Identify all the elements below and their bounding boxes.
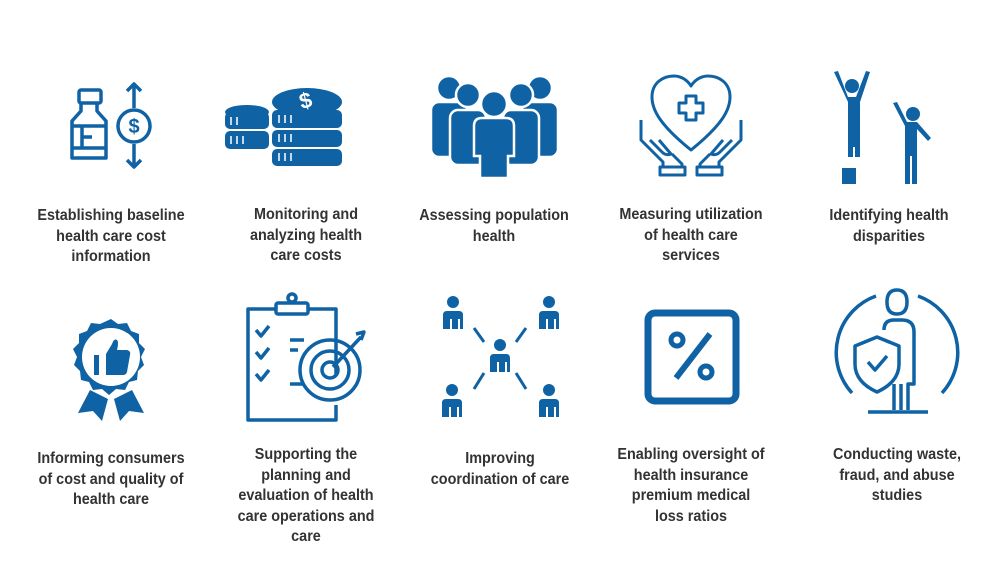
icon: two people disparities [834, 71, 931, 184]
text: identifying disparities: disparities [853, 228, 925, 244]
icon: heart in hands [641, 76, 741, 175]
text: informing consumers: of cost and quality of [39, 470, 183, 488]
text: enabling oversight: premium medical [632, 487, 750, 504]
text: assessing population: Assessing population [419, 207, 569, 224]
text: monitoring costs: Monitoring and [254, 206, 358, 223]
icon: award badge thumbs up [73, 319, 145, 421]
text: establishing baseline: health care cost [56, 228, 166, 244]
text: improving coordination: Improving [465, 450, 535, 467]
text: enabling oversight: Enabling oversight of [617, 446, 765, 463]
icon: percent box [648, 313, 736, 401]
text: informing consumers: health care [73, 491, 149, 508]
text: informing consumers [37, 450, 185, 508]
icon: coin stacks: $ [296, 87, 315, 114]
text: supporting planning: planning and [261, 466, 351, 484]
text: supporting planning: evaluation of health [238, 487, 374, 504]
text: identifying disparities: Identifying health [829, 207, 949, 224]
text: enabling oversight: loss ratios [655, 508, 727, 524]
text: enabling oversight [617, 446, 765, 524]
text: supporting planning: care operations and [238, 508, 374, 524]
text: identifying disparities [829, 207, 949, 244]
icon: medicine bottle with dollar: $ [128, 116, 140, 138]
icon: medicine bottle with dollar [72, 84, 150, 167]
text: improving coordination [431, 450, 569, 488]
text: monitoring costs [250, 206, 362, 264]
text: measuring utilization: of health care [644, 226, 738, 244]
icon: group of people [431, 76, 558, 178]
text: supporting planning: Supporting the [255, 446, 357, 463]
text: improving coordination: coordination of care [431, 470, 569, 488]
text: conducting studies: studies [872, 487, 922, 504]
text: supporting planning: care [291, 528, 321, 545]
text: measuring utilization: services [662, 247, 720, 264]
text: establishing baseline [37, 207, 185, 265]
text: conducting studies: Conducting waste, [833, 446, 961, 463]
text: enabling oversight: health insurance [634, 466, 748, 484]
icon: clipboard with target [248, 294, 364, 420]
text: informing consumers: Informing consumers [37, 450, 185, 467]
text: supporting planning [238, 446, 374, 545]
text: monitoring costs: analyzing health [250, 226, 362, 244]
text: measuring utilization: Measuring utilization [619, 206, 763, 223]
text: establishing baseline: Establishing baseline [37, 207, 185, 224]
text: conducting studies: fraud, and abuse [839, 466, 955, 484]
text: monitoring costs: care costs [270, 247, 342, 264]
text: establishing baseline: information [71, 248, 151, 265]
icon: coin stacks [225, 87, 342, 166]
text: conducting studies [833, 446, 961, 504]
text: assessing population: health [473, 228, 515, 244]
icon: network of people [442, 296, 559, 417]
text: assessing population [419, 207, 569, 244]
text: measuring utilization [619, 206, 763, 264]
icon: person with shield [836, 290, 958, 412]
